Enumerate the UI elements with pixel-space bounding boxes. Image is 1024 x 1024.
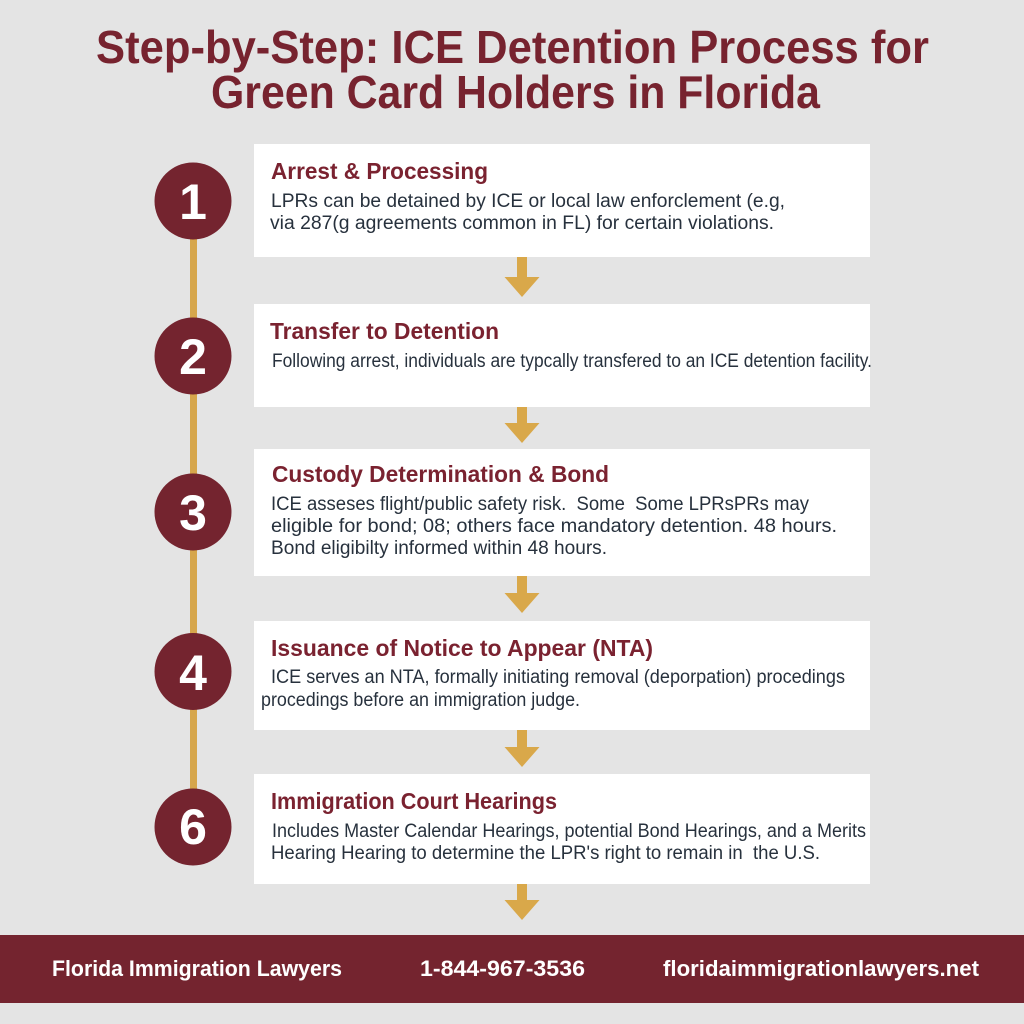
- panel: custody determination and bond: ICE asseses flight/public safety risk. Some Some LPRsPRs may: [271, 494, 809, 515]
- step 1: number badge: 1: [179, 174, 207, 230]
- panel: issuance of notice to appear: procedings before an immigration judge.: [261, 690, 580, 711]
- panel: transfer to detention: Transfer to Detention: [270, 318, 499, 344]
- footer contact bar: [0, 935, 1024, 1003]
- panel: immigration court hearings: [254, 774, 870, 884]
- panel: custody determination and bond: eligible for bond; 08; others face mandatory detention. 48 hours.: [271, 516, 837, 537]
- title: Step-by-Step: ICE Detention Process for: [96, 21, 929, 73]
- step 2: number badge: 2: [179, 329, 207, 385]
- arrow: step 5 to footer: [504, 884, 540, 920]
- footer contact bar: floridaimmigrationlawyers.net: [663, 956, 980, 981]
- panel: arrest and processing: via 287(g agreements common in FL) for certain violations.: [270, 213, 774, 234]
- panel: issuance of notice to appear: ICE serves an NTA, formally initiating removal (deporpation) procedings: [271, 667, 845, 688]
- panel: issuance of notice to appear: [254, 621, 870, 730]
- step 1: number badge: [154, 162, 232, 240]
- panel: custody determination and bond: Bond eligibilty informed within 48 hours.: [271, 538, 607, 559]
- title: [96, 21, 929, 118]
- arrow: step 4 to 5: [504, 730, 540, 767]
- step 2: number badge: [154, 318, 232, 394]
- timeline connector line: [190, 201, 197, 827]
- panel: immigration court hearings: Includes Master Calendar Hearings, potential Bond Hearings, and a Merits: [272, 821, 866, 842]
- step 6: number badge: [154, 788, 232, 866]
- step 4: number badge: [154, 633, 232, 710]
- title: Green Card Holders in Florida: [211, 66, 820, 118]
- step 3: number badge: [154, 474, 232, 550]
- footer contact bar: Florida Immigration Lawyers: [52, 956, 342, 981]
- arrow: step 1 to 2: [504, 257, 540, 297]
- panel: custody determination and bond: Custody Determination & Bond: [272, 461, 609, 487]
- step 6: number badge: 6: [179, 799, 207, 855]
- panel: arrest and processing: Arrest & Processing: [271, 158, 488, 184]
- step 3: number badge: 3: [179, 485, 207, 541]
- panel: immigration court hearings: Immigration Court Hearings: [271, 788, 557, 814]
- step 4: number badge: 4: [179, 645, 207, 701]
- arrow: step 3 to 4: [504, 576, 540, 613]
- panel: arrest and processing: [254, 144, 870, 257]
- panel: transfer to detention: [254, 304, 872, 407]
- arrow: step 2 to 3: [504, 407, 540, 443]
- panel: custody determination and bond: [254, 449, 870, 576]
- panel: immigration court hearings: Hearing Hearing to determine the LPR's right to remain in the U.S.: [271, 843, 820, 864]
- panel: arrest and processing: LPRs can be detained by ICE or local law enforclement (e.g,: [271, 191, 785, 212]
- panel: issuance of notice to appear: Issuance of Notice to Appear (NTA): [271, 635, 653, 661]
- footer contact bar: 1-844-967-3536: [420, 956, 585, 981]
- panel: transfer to detention: Following arrest, individuals are typcally transfered to an ICE detention facility.: [272, 351, 872, 372]
